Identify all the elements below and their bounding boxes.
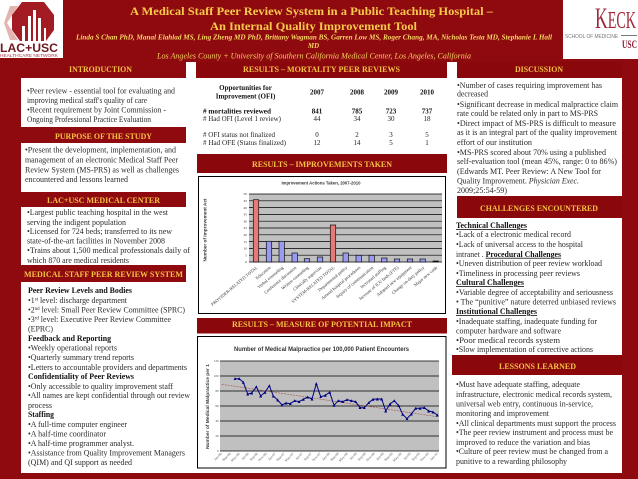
text: challenges body: •Inadequate staffing, inadequate funding for: [456, 317, 597, 326]
bar chart: improvement actions taken: Major new code: [413, 265, 438, 288]
table: opportunities for improvement: # Had OFI (Level 1 review): [203, 115, 282, 123]
title block: Linda S Chan PhD, Manal Elahlad MS, Ling Zheng MD PhD, Brittany Wagman BS, Garren Low MS, Roger Chang, MA, Nicholas Testa MD, Stephanie L Hall: [75, 34, 552, 42]
panel: discussion: [457, 62, 622, 196]
panel: lessons learned: [452, 355, 622, 473]
logo: LAC+USC Healthcare Network: [0, 0, 63, 58]
text: lessons body: monitoring and improvement: [456, 409, 550, 418]
bar chart: improvement actions taken: 40: [244, 206, 247, 210]
text: challenges body: •Poor medical records system: [456, 336, 561, 345]
text: peer review levels: (EPRC): [28, 324, 53, 334]
logo: Keck School of Medicine USC: [563, 0, 638, 59]
text: staffing: •A half-time programmer analyst.: [28, 439, 134, 448]
line chart: medical malpractice per 100,000 encounters: Nov-07: [311, 452, 322, 462]
table: opportunities for improvement: 5: [425, 131, 429, 139]
text: challenges body: •Slow implementation of corrective actions: [456, 345, 593, 354]
table: opportunities for improvement: Improvement (OFI): [216, 92, 276, 100]
text: discussion body: •Number of cases requiring improvement has: [457, 81, 602, 90]
text: challenges body: •Lack of universal access to the hospital: [456, 240, 584, 249]
table: opportunities for improvement: 5: [389, 139, 393, 147]
text: staffing: Staffing: [28, 410, 54, 419]
text: peer review levels: rd: [35, 317, 39, 322]
panel: medical staff peer review system: [21, 270, 191, 473]
text: peer review levels: level: Small Peer Review Committee (SPRC): [40, 306, 185, 314]
bar chart: improvement actions taken: Amend hospital procedures: [320, 265, 362, 301]
table: opportunities for improvement: 1: [425, 139, 429, 147]
table: opportunities for improvement: 3: [389, 131, 393, 139]
line chart: medical malpractice per 100,000 encounters: 20: [216, 434, 219, 438]
title block: Los Angeles County + University of Southern California Medical Center, Los Angeles, California: [156, 52, 471, 60]
line chart: medical malpractice per 100,000 encounters: Jan-09: [375, 452, 385, 461]
table: opportunities for improvement: 18: [424, 115, 431, 123]
text: discussion body: •Significant decrease in medical malpractice claim: [457, 100, 619, 109]
text: lessons body: infrastructure, electronic medical records system,: [456, 390, 612, 399]
line chart: medical malpractice per 100,000 encounters: Jul-06: [241, 452, 250, 461]
text: peer review levels: level: Executive Peer Review Committee: [39, 315, 171, 324]
text: peer review levels: Peer Review Levels and Bodies: [28, 286, 132, 295]
panel: challenges encountered: [452, 196, 622, 355]
table: opportunities for improvement: Opportunities for: [219, 84, 272, 92]
text: staffing: (QIM) and QI support as needed: [28, 458, 132, 467]
line chart: medical malpractice per 100,000 encounters: Jan-10: [429, 452, 439, 461]
text: challenges body: •Timeliness in processing peer reviews: [456, 269, 580, 278]
text: discussion body: 2009;25:54-59): [457, 186, 507, 195]
bar chart: improvement actions taken: 35: [244, 213, 247, 217]
bar chart: improvement actions taken: Clinically supervise: [292, 265, 323, 292]
text: introduction body: improving medical staff's quality of care: [27, 96, 147, 105]
line chart: medical malpractice per 100,000 encounters: Sep-07: [303, 452, 313, 462]
text: challenges body: •Lack of a electronic medical record: [456, 230, 571, 239]
text: purpose body: [25, 146, 179, 184]
line chart: medical malpractice per 100,000 encounters: Nov-09: [419, 452, 430, 462]
text: staffing: •Assistance from Quality Improvement Managers: [28, 448, 185, 458]
table: opportunities for improvement: 2008: [350, 88, 364, 96]
bar chart: improvement actions taken: Verbal counseling: [256, 264, 285, 290]
line chart: medical malpractice per 100,000 encounters: Sep-08: [357, 452, 367, 462]
text: staffing: [28, 410, 185, 467]
text: medical center body: serving the indigent population: [27, 218, 126, 227]
table: opportunities for improvement: 785: [352, 107, 363, 115]
text: challenges body: Institutional Challenges: [456, 307, 537, 316]
heading: purpose: PURPOSE OF THE STUDY: [55, 132, 152, 141]
table: opportunities for improvement: 0: [315, 131, 319, 139]
text: confidentiality of peer reviews: Confidentiality of Peer Reviews: [28, 372, 134, 381]
logo: LAC+USC Healthcare Network: HEALTHCARE NETWORK: [0, 53, 58, 58]
bar chart: improvement actions taken: 30: [244, 219, 247, 223]
panel: LAC+USC medical center: [21, 196, 191, 265]
bar chart: improvement actions taken: 5: [245, 253, 247, 257]
bar chart: improvement actions taken: 10: [244, 247, 247, 251]
line chart: medical malpractice per 100,000 encounters: 100: [214, 374, 219, 378]
text: staffing: •A half-time coordinator: [28, 430, 106, 438]
table: opportunities for improvement: 44: [314, 115, 321, 123]
text: challenges body: computer hardware and software: [456, 326, 561, 336]
text: challenges body: Cultural Challenges: [456, 278, 524, 287]
table: opportunities for improvement: 30: [388, 115, 395, 123]
line chart: medical malpractice per 100,000 encounters: [198, 336, 446, 468]
line chart: medical malpractice per 100,000 encounters: Mar-08: [329, 452, 340, 462]
text: discussion body: as it is an integral part of the quality improvement: [457, 128, 618, 137]
text: challenges body: [456, 221, 616, 354]
line chart: medical malpractice per 100,000 encounters: Jul-08: [349, 452, 358, 461]
text: confidentiality of peer reviews: [28, 372, 190, 410]
heading: lessons learned: LESSONS LEARNED: [499, 362, 576, 371]
table: opportunities for improvement: # Had OFE (Status finalized): [203, 139, 287, 147]
line chart: medical malpractice per 100,000 encounters: 120: [214, 359, 219, 363]
text: lessons body: •The peer review instrument and process must be: [456, 428, 613, 437]
line chart: medical malpractice per 100,000 encounters: Jan-08: [321, 452, 331, 461]
bar chart: improvement actions taken: Improvement Actions Taken, 2007-2010: [282, 180, 361, 186]
line chart: medical malpractice per 100,000 encounters: 40: [216, 419, 219, 423]
heading: challenges encountered: CHALLENGES ENCOUNTERED: [480, 204, 598, 213]
bar chart: improvement actions taken: Increased staffing: [359, 264, 388, 289]
line chart: medical malpractice per 100,000 encounters: Mar-07: [275, 452, 286, 462]
text: lessons body: universal web entry, continuous in-service,: [456, 400, 593, 408]
text: peer review levels: •2: [28, 306, 35, 314]
line chart: medical malpractice per 100,000 encounters: Sep-06: [249, 452, 259, 462]
bar chart: improvement actions taken: SYSTEM-RELATED TOTAL: [291, 265, 336, 304]
bar chart: improvement actions taken: Written counseling: [280, 264, 310, 291]
text: confidentiality of peer reviews: •Only accessible to quality improvement staff: [28, 382, 173, 391]
heading: LAC+USC medical center: LAC+USC MEDICAL CENTER: [47, 196, 160, 205]
bar chart: improvement actions taken: Change on-duty policy: [391, 264, 426, 295]
text: discussion body: •Direct impact of MS-PRS is difficult to measure: [457, 119, 616, 128]
text: purpose body: •Present the development, implementation, and: [25, 146, 176, 154]
text: challenges body: intranet . Procedural Challenges: [456, 250, 561, 259]
table: opportunities for improvement: # mortalities reviewed: [203, 107, 271, 115]
text: peer review levels: [28, 286, 185, 334]
line chart: medical malpractice per 100,000 encounters: May-06: [230, 452, 241, 463]
text: purpose body: Review System (MS-PRS) as well as challenges: [25, 166, 179, 174]
text: introduction body: Ongoing Professional Practice Evaluation: [27, 115, 151, 124]
bar chart: improvement actions taken: Departmental policy: [317, 264, 349, 292]
text: staffing: •A full-time computer engineer: [28, 420, 127, 429]
heading: discussion: DISCUSSION: [515, 65, 563, 74]
text: peer review levels: st: [35, 298, 39, 303]
table: opportunities for improvement: 841: [312, 107, 323, 115]
text: feedback and reporting: •Letters to accountable providers and departments: [28, 363, 187, 372]
text: challenges body: •Uneven distribution of peer review workload: [456, 259, 602, 268]
table: opportunities for improvement: 2007: [310, 88, 324, 96]
table: opportunities for improvement: [203, 84, 434, 147]
line chart: medical malpractice per 100,000 encounters: 80: [216, 389, 219, 393]
table: opportunities for improvement: 12: [314, 139, 321, 147]
bar chart: improvement actions taken: 50: [244, 192, 247, 196]
line chart: medical malpractice per 100,000 encounters: Number of Medical Malpractice per 1: [205, 363, 210, 449]
text: feedback and reporting: •Weekly operational reports: [28, 344, 117, 352]
table: opportunities for improvement: 34: [354, 115, 361, 123]
line chart: medical malpractice per 100,000 encounters: Nov-08: [365, 452, 376, 462]
text: discussion body: effort of our institution: [457, 138, 532, 147]
line chart: medical malpractice per 100,000 encounters: Nov-06: [257, 452, 268, 462]
line chart: medical malpractice per 100,000 encounters: Mar-09: [383, 452, 394, 462]
line chart: medical malpractice per 100,000 encounters: 0: [217, 449, 219, 453]
line chart: medical malpractice per 100,000 encounters: Sep-09: [411, 452, 421, 462]
text: lessons body: [456, 380, 616, 466]
text: feedback and reporting: •Quarterly summary trend reports: [28, 353, 134, 362]
logo: LAC+USC Healthcare Network: LAC+USC: [0, 41, 58, 55]
text: lessons body: •All clinical departments must support the process: [456, 419, 616, 428]
bar chart: improvement actions taken: Number of Improvement Act: [202, 198, 208, 262]
text: discussion body: self-evaluation tool (mean 45%, range: 0 to 86%): [457, 157, 617, 166]
text: peer review levels: nd: [35, 307, 40, 312]
table: opportunities for improvement: 737: [422, 107, 433, 115]
text: lessons body: improved to reduce the variation and bias: [456, 438, 590, 447]
panel: introduction: [21, 65, 191, 127]
bar chart: improvement actions taken: PROVIDER-RELATED TOTAL: [210, 265, 259, 307]
text: peer review levels: •1: [28, 296, 35, 305]
panel: results mortality peer reviews: [196, 62, 447, 147]
text: feedback and reporting: [28, 334, 187, 372]
title block: A Medical Staff Peer Review System in a Public Teaching Hospital –: [130, 4, 494, 18]
text: medical center body: •Trains about 1,500 medical professionals daily of: [27, 246, 190, 255]
bar chart: improvement actions taken: Education: [254, 264, 272, 280]
line chart: medical malpractice per 100,000 encounters: Jan-06: [213, 452, 223, 461]
line chart: medical malpractice per 100,000 encounters: Mar-06: [221, 452, 232, 462]
text: discussion body: [457, 81, 619, 195]
panel: results improvements taken: [197, 154, 447, 314]
bar chart: improvement actions taken: [198, 176, 446, 314]
title block: An Internal Quality Improvement Tool: [210, 19, 418, 33]
table: opportunities for improvement: 2010: [420, 88, 434, 96]
bar chart: improvement actions taken: 0: [245, 260, 247, 264]
text: feedback and reporting: Feedback and Reporting: [28, 334, 111, 343]
text: peer review levels: level: discharge department: [38, 296, 128, 305]
title block: [75, 4, 552, 60]
text: introduction body: [27, 86, 175, 124]
text: medical center body: [27, 208, 190, 265]
heading: results improvements: RESULTS – IMPROVEMENTS TAKEN: [252, 160, 392, 169]
text: challenges body: •Variable degree of acceptability and seriousness: [456, 288, 613, 297]
text: lessons body: •Culture of peer review must be changed from a: [456, 447, 608, 456]
text: introduction body: •Peer review - essential tool for evaluating and: [27, 86, 175, 96]
text: discussion body: decreased: [457, 90, 488, 98]
line chart: medical malpractice per 100,000 encounters: Number of Medical Malpractice per 100,000 Patient Encounters: [234, 347, 410, 353]
heading: medical staff peer review system: MEDICAL STAFF PEER REVIEW SYSTEM: [24, 270, 183, 279]
panel: purpose of the study: [21, 132, 191, 192]
text: lessons body: •Must have adequate staffing, adequate: [456, 380, 580, 389]
line chart: medical malpractice per 100,000 encounters: Jul-09: [403, 452, 412, 461]
line chart: medical malpractice per 100,000 encounters: Jan-07: [267, 452, 277, 461]
logo: Keck School of Medicine USC: SCHOOL OF MEDICINE: [565, 34, 618, 40]
text: medical center body: •Licensed for 724 beds; transferred to its new: [27, 227, 172, 236]
bar chart: improvement actions taken: Adopted new equipment: [376, 264, 413, 297]
line chart: medical malpractice per 100,000 encounters: 60: [216, 404, 219, 408]
text: discussion body: Quality Improvement. Physician Exec.: [457, 176, 579, 186]
text: introduction body: •Recent requirement by Joint Commission -: [27, 106, 166, 114]
text: challenges body: Technical Challenges: [456, 221, 527, 230]
text: discussion body: •MS-PRS scored about 70% using a published: [457, 148, 606, 157]
line chart: medical malpractice per 100,000 encounters: May-07: [284, 452, 295, 463]
text: medical center body: state-of-the-art facilities in November 2008: [27, 236, 165, 246]
text: peer review levels: •3: [28, 315, 35, 324]
table: opportunities for improvement: 2009: [384, 88, 398, 96]
table: opportunities for improvement: 723: [386, 107, 397, 115]
text: confidentiality of peer reviews: process: [28, 401, 52, 410]
text: lessons body: punitive to a rewarding philosophy: [456, 457, 567, 466]
text: confidentiality of peer reviews: •All names are kept confidential through out review: [28, 391, 190, 400]
line chart: medical malpractice per 100,000 encounters: Jul-07: [295, 452, 304, 461]
line chart: medical malpractice per 100,000 encounters: May-09: [392, 452, 403, 463]
text: challenges body: • The “punitive” nature deterred unbiased reviews: [456, 298, 616, 306]
table: opportunities for improvement: 2: [355, 131, 359, 139]
bar chart: improvement actions taken: Inquiry of communication: [335, 264, 375, 299]
text: medical center body: which 870 are medical residents: [27, 256, 129, 265]
bar chart: improvement actions taken: 25: [244, 226, 247, 230]
heading: results mortality: RESULTS – MORTALITY PEER REVIEWS: [243, 65, 401, 74]
panel: results measure of potential impact: [197, 318, 447, 468]
table: opportunities for improvement: 14: [354, 139, 361, 147]
bar chart: improvement actions taken: Conference discussion: [263, 264, 298, 295]
text: medical center body: •Largest public teaching hospital in the west: [27, 208, 169, 217]
bar chart: improvement actions taken: Increase of ICU beds (FTE): [358, 265, 400, 301]
bar chart: improvement actions taken: 20: [244, 233, 247, 237]
heading: introduction: INTRODUCTION: [69, 65, 132, 74]
text: purpose body: encountered and lessons learned: [25, 175, 128, 184]
line chart: medical malpractice per 100,000 encounters: May-08: [338, 452, 349, 463]
heading: results measure: RESULTS – MEASURE OF POTENTIAL IMPACT: [232, 320, 413, 329]
text: discussion body: (Edwards MT. Peer Review: A New Tool for: [457, 167, 601, 176]
text: discussion body: rate could be related only in part to MS-PRS: [457, 109, 598, 118]
bar chart: improvement actions taken: 45: [244, 199, 247, 203]
title block: MD: [307, 42, 319, 50]
bar chart: improvement actions taken: 15: [244, 240, 247, 244]
text: purpose body: management of an electronic Medical Staff Peer: [25, 156, 178, 164]
table: opportunities for improvement: # OFI status not finalized: [203, 131, 276, 139]
